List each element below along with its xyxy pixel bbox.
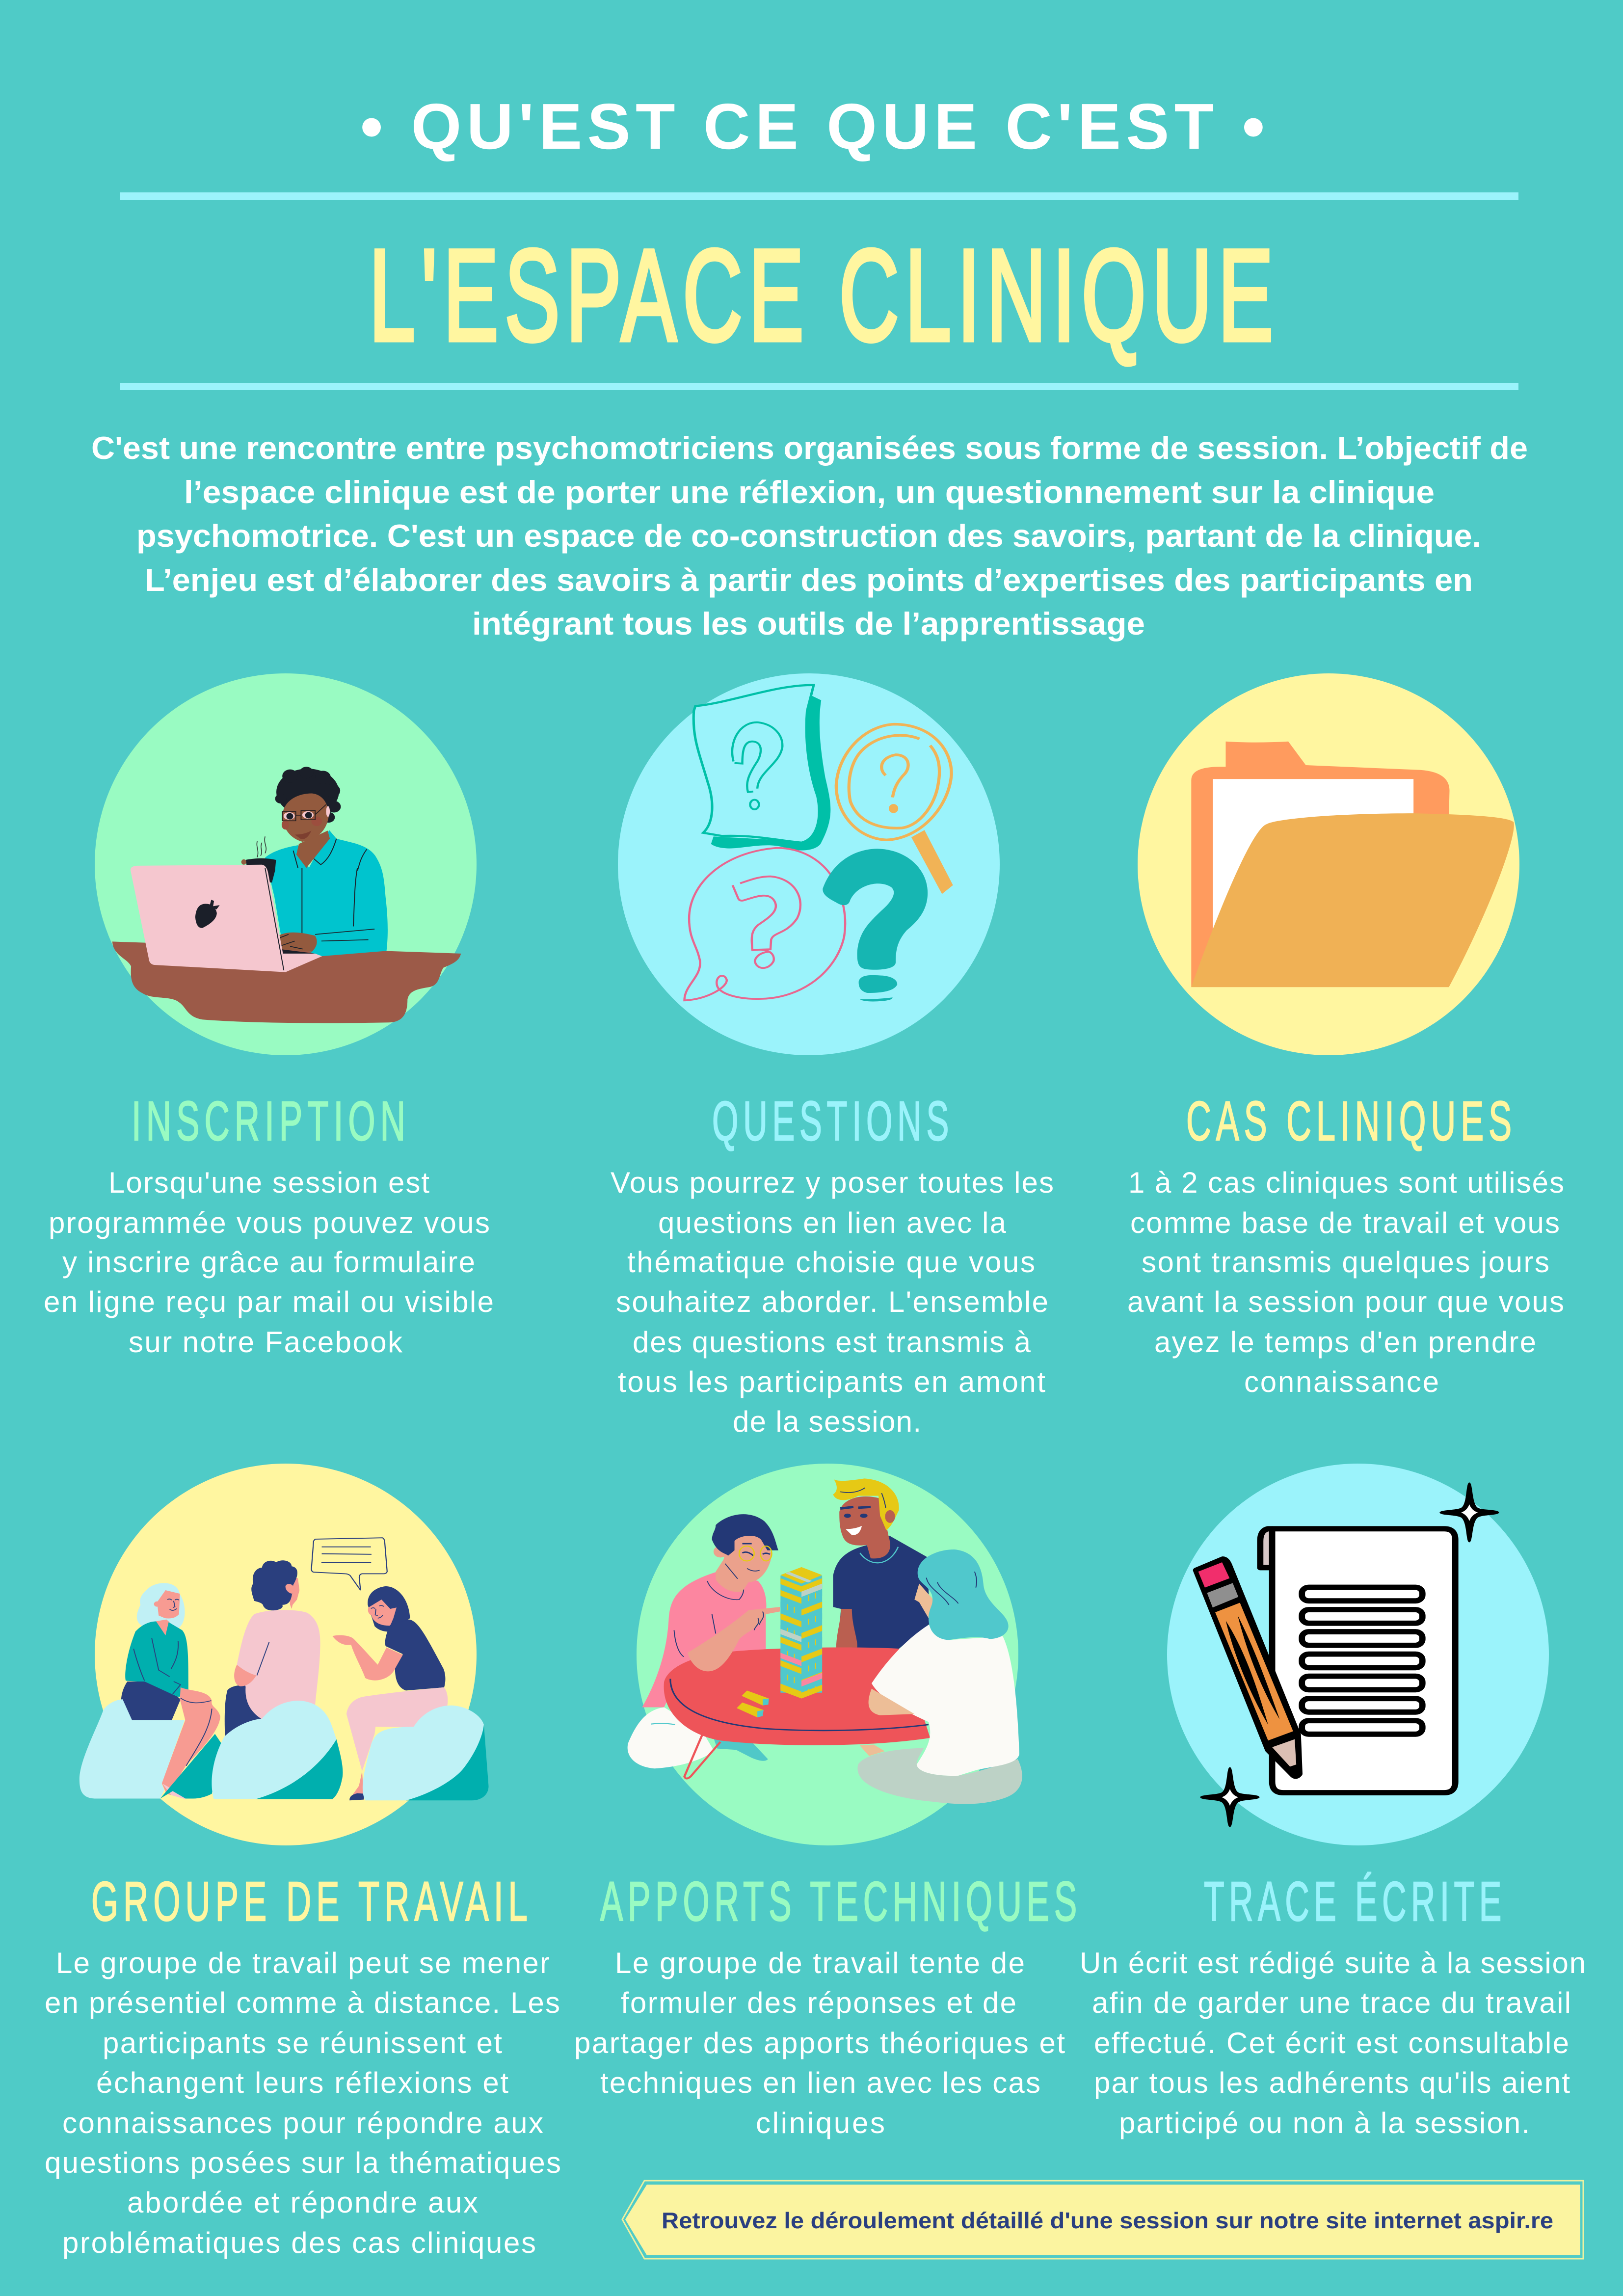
pouf left: [160, 1734, 221, 1798]
text block: groupe de travail: questions posées sur la thématiques: [45, 2146, 561, 2179]
text block: questions: tous les participants en amont: [618, 1365, 1045, 1398]
big question mark: [823, 849, 928, 970]
foot: [713, 1735, 768, 1761]
loose blocks: [742, 1690, 769, 1706]
person middle: [225, 1685, 262, 1736]
panel: trace ecrite illustration: [1167, 1464, 1549, 1845]
text block: inscription: en ligne reçu par mail ou visible: [44, 1285, 494, 1318]
white shirt: [872, 1625, 1019, 1776]
shirt: [265, 830, 388, 956]
text block: groupe de travail: abordée et répondre aux: [127, 2186, 478, 2219]
sparkle top: [1439, 1482, 1499, 1542]
callout: website banner: Retrouvez le déroulement détaillé d'une session sur notre site internet aspir.re: [662, 2208, 1553, 2233]
heading: apports techniques: APPORTS TECHNIQUES: [600, 1870, 1082, 1932]
document sheet: [1272, 1529, 1455, 1793]
neck and face: [716, 1536, 772, 1592]
heading: inscription: INSCRIPTION: [132, 1090, 410, 1152]
white trousers: [628, 1708, 714, 1768]
text block: questions: souhaitez aborder. L'ensemble: [616, 1285, 1048, 1318]
heading: groupe de travail: GROUPE DE TRAVAIL: [91, 1870, 532, 1932]
bottom rule: [120, 383, 1518, 390]
text block: trace ecrite: Un écrit est rédigé suite à la session: [1080, 1947, 1586, 1979]
intro paragraph: intégrant tous les outils de l’apprentissage: [472, 606, 1145, 641]
glasses: [739, 1546, 754, 1561]
text block: cas cliniques: sont transmis quelques jours: [1142, 1246, 1549, 1279]
text block: groupe de travail: Le groupe de travail peut se mener: [56, 1947, 550, 1979]
text block: apports techniques: cliniques: [756, 2107, 885, 2139]
text block: apports techniques: formuler des réponses et de: [621, 1986, 1016, 2019]
text block: questions: [611, 1166, 1054, 1438]
document fold: [1260, 1529, 1272, 1568]
text lines: [1302, 1587, 1422, 1734]
panel: questions illustration: [618, 673, 1000, 1055]
folder back: [1191, 742, 1449, 987]
text block: inscription: sur notre Facebook: [129, 1326, 403, 1359]
text block: questions: thématique choisie que vous: [627, 1246, 1035, 1279]
text block: trace ecrite: afin de garder une trace du travail: [1092, 1986, 1571, 2019]
speech bubble: [311, 1538, 387, 1590]
hair: [712, 1514, 778, 1556]
hand: [278, 933, 317, 952]
eyes: [284, 812, 295, 820]
boy blond head: [839, 1496, 890, 1558]
text block: apports techniques: [574, 1947, 1065, 2139]
title: Qu'est ce que c'est: • QU'EST CE QUE C'EST •: [360, 90, 1265, 162]
top rule: [120, 192, 1518, 200]
text block: questions: Vous pourrez y poser toutes les: [611, 1166, 1054, 1199]
panel: cas cliniques illustration: [1138, 673, 1519, 1055]
laptop screen: [131, 865, 286, 972]
teal hair: [918, 1549, 1009, 1640]
pouf middle: [256, 1739, 343, 1799]
text block: questions: questions en lien avec la: [658, 1206, 1007, 1239]
text block: questions: des questions est transmis à: [633, 1326, 1031, 1359]
callout: website banner: [622, 2181, 1583, 2259]
text block: inscription: programmée vous pouvez vous: [49, 1206, 490, 1239]
text block: groupe de travail: problématiques des cas cliniques: [62, 2226, 536, 2259]
text block: cas cliniques: comme base de travail et vous: [1130, 1206, 1560, 1239]
text block: apports techniques: partager des apports théoriques et: [574, 2027, 1065, 2059]
boy glasses shirt: [642, 1572, 766, 1708]
pencil: [1196, 1559, 1300, 1776]
note sheet with question mark: [693, 685, 819, 843]
text block: groupe de travail: [45, 1947, 561, 2259]
laptop base: [281, 950, 322, 972]
jenga tower: [780, 1567, 822, 1699]
magnifier handle: [911, 830, 953, 894]
pouf right: [406, 1725, 488, 1800]
text block: groupe de travail: connaissances pour répondre aux: [62, 2107, 543, 2139]
text block: trace ecrite: [1080, 1947, 1586, 2139]
intro paragraph: psychomotrice. C'est un espace de co-construction des savoirs, partant de la clinique.: [136, 518, 1481, 554]
intro paragraph: C'est une rencontre entre psychomotriciens organisées sous forme de session. L’objectif de: [91, 430, 1528, 466]
text block: cas cliniques: 1 à 2 cas cliniques sont utilisés: [1128, 1166, 1564, 1199]
text block: apports techniques: Le groupe de travail tente de: [615, 1947, 1025, 1979]
panel: groupe de travail illustration: [80, 1464, 488, 1845]
text block: trace ecrite: par tous les adhérents qu'ils aient: [1094, 2066, 1570, 2099]
sheet of paper: [1213, 779, 1413, 952]
sparkle bottom: [1200, 1767, 1260, 1827]
table leg: [685, 1733, 720, 1779]
text block: groupe de travail: en présentiel comme à distance. Les: [45, 1986, 560, 2019]
text block: cas cliniques: connaissance: [1244, 1365, 1439, 1398]
magnifier rings: [836, 724, 952, 840]
text block: cas cliniques: [1127, 1166, 1564, 1398]
heading: questions: QUESTIONS: [712, 1090, 954, 1152]
neck and face: [296, 830, 330, 868]
text block: cas cliniques: ayez le temps d'en prendre: [1154, 1326, 1536, 1359]
text block: inscription: y inscrire grâce au formulaire: [62, 1246, 475, 1279]
text block: trace ecrite: participé ou non à la session.: [1119, 2107, 1530, 2139]
arm: [688, 1607, 780, 1671]
text block: groupe de travail: participants se réunissent et: [103, 2027, 502, 2059]
girl face: [914, 1583, 933, 1618]
woman left: [137, 1583, 185, 1629]
speech bubble with question mark: [685, 848, 845, 1000]
text block: apports techniques: techniques en lien avec les cas: [600, 2066, 1040, 2099]
mug: [246, 858, 276, 882]
panel: inscription illustration: [95, 673, 477, 1055]
text block: inscription: Lorsqu'une session est: [108, 1166, 429, 1199]
intro paragraph: l’espace clinique est de porter une réflexion, un questionnement sur la clinique: [184, 474, 1435, 510]
strawberry logo: [195, 904, 217, 928]
woman right: [368, 1586, 410, 1632]
text block: questions: de la session.: [733, 1405, 921, 1438]
panel: apports techniques illustration: [628, 1464, 1022, 1845]
grey trousers: [857, 1748, 1022, 1804]
intro paragraph: [91, 430, 1528, 641]
folder front: [1191, 813, 1514, 987]
note thick back edge: [711, 696, 830, 851]
text block: trace ecrite: effectué. Cet écrit est consultable: [1094, 2027, 1569, 2059]
table: [664, 1647, 930, 1745]
desk: [112, 941, 461, 1023]
boy blond shirt: [833, 1536, 930, 1649]
intro paragraph: L’enjeu est d’élaborer des savoirs à partir des points d’expertises des participants en: [145, 562, 1473, 598]
glasses: [282, 804, 326, 821]
text block: inscription: [44, 1166, 494, 1359]
text block: groupe de travail: échangent leurs réflexions et: [96, 2066, 508, 2099]
hair: [275, 767, 341, 823]
text block: cas cliniques: avant la session pour que vous: [1127, 1285, 1564, 1318]
